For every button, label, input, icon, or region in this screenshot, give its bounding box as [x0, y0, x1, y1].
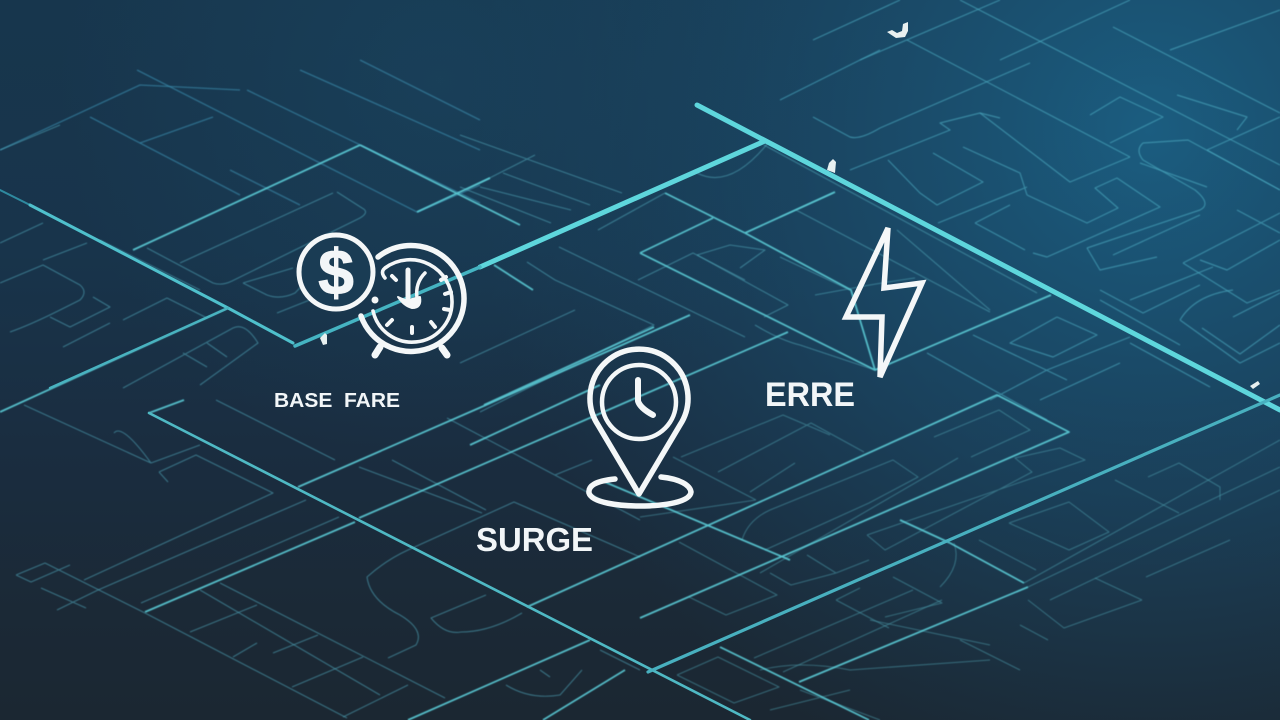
- mid street network: [0, 145, 1069, 720]
- thin street grid: left and centre: [0, 125, 1037, 718]
- small white map markers: [320, 22, 1260, 389]
- dollar sign: $: [318, 236, 354, 308]
- faint street grid: upper left: [0, 60, 480, 212]
- label: base fare: BASE FARE: [274, 390, 400, 412]
- icon: alarm clock: [361, 245, 464, 355]
- icon: lightning bolt: [846, 228, 922, 377]
- thin street grid: lower right: [640, 410, 1280, 720]
- label: erre: ERRE: [765, 376, 855, 414]
- thin street grid: upper right: [780, 0, 1280, 420]
- label: surge: SURGE: [476, 521, 593, 558]
- icon: location pin with clock: [589, 349, 691, 506]
- icon: dollar coin: [299, 235, 373, 309]
